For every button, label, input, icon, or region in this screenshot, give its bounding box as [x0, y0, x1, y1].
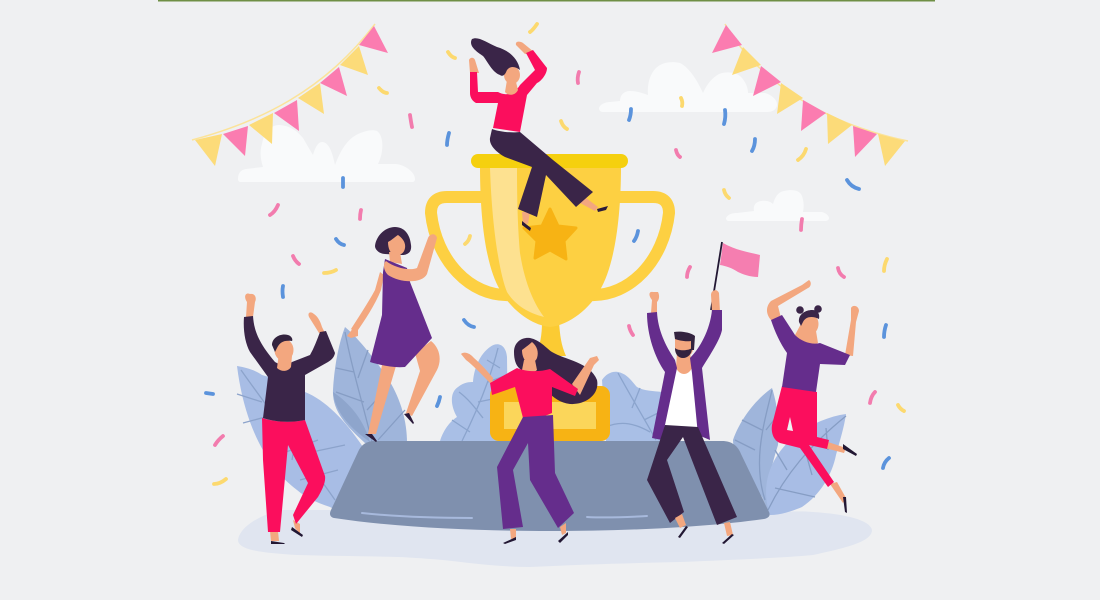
back arm [351, 272, 384, 333]
trousers [497, 415, 574, 529]
hair [471, 38, 520, 76]
confetti [206, 24, 904, 484]
feet [510, 523, 566, 539]
trousers [490, 129, 593, 217]
figure: woman in pink top centre [461, 338, 599, 544]
pink trousers [772, 386, 834, 487]
flag [720, 243, 760, 277]
front arm [384, 234, 437, 281]
trophy cup highlight [490, 168, 544, 317]
pink top [470, 50, 547, 132]
jacket [647, 310, 722, 440]
figure: bearded man with flag [647, 242, 760, 544]
face [802, 314, 818, 334]
trophy [431, 154, 669, 441]
bunting: right [712, 24, 908, 166]
gap between legs [787, 417, 793, 431]
trophy plate [504, 402, 596, 429]
figure: man in dark sweater [244, 293, 335, 544]
arms [767, 280, 859, 356]
top green rule [158, 0, 935, 2]
purple top [771, 315, 850, 392]
shoes [365, 413, 414, 442]
leaves: left large [237, 366, 363, 515]
neck [676, 352, 692, 374]
leaves: right pair [733, 388, 846, 515]
pedestal [330, 441, 770, 531]
leaves: centre-left bush [440, 344, 508, 441]
trophy rim [471, 154, 628, 168]
neck and face [522, 360, 537, 373]
hands [649, 290, 720, 313]
hands and feet [245, 293, 325, 333]
leaves: centre-right bush [602, 372, 662, 441]
beard [675, 348, 692, 358]
trophy star [524, 209, 576, 259]
feet [675, 514, 733, 536]
figure: woman in purple dress [347, 227, 440, 442]
sweater [244, 316, 335, 422]
clouds [238, 62, 829, 221]
hair [674, 332, 695, 350]
face [675, 338, 693, 357]
bunting: left [192, 24, 388, 166]
pink top [490, 368, 578, 418]
trophy stem [536, 322, 566, 356]
hair [375, 227, 411, 255]
trousers [647, 425, 737, 525]
shoes [843, 444, 857, 513]
hair [514, 338, 597, 404]
arms [461, 353, 599, 395]
neck and face [277, 353, 292, 371]
trophy cup [480, 166, 621, 327]
flagpole [711, 242, 722, 310]
figure: woman sitting on trophy [469, 38, 608, 231]
white shirt [665, 366, 697, 427]
hair and buns [799, 310, 819, 326]
trophy handle: left [431, 197, 510, 295]
dress [370, 259, 432, 367]
raised hands [469, 42, 534, 73]
neck and face [505, 80, 518, 95]
leaves: left tall [333, 327, 407, 443]
ground shadow [238, 510, 872, 567]
figure: jumping woman [767, 280, 859, 513]
legs [368, 341, 440, 434]
legs and feet [522, 198, 598, 224]
neck [795, 322, 818, 344]
trophy base [490, 386, 610, 441]
trousers [262, 418, 325, 532]
legs [825, 441, 846, 503]
trophy handle: right [590, 197, 669, 295]
hair [272, 335, 292, 352]
neck and face [389, 252, 402, 264]
